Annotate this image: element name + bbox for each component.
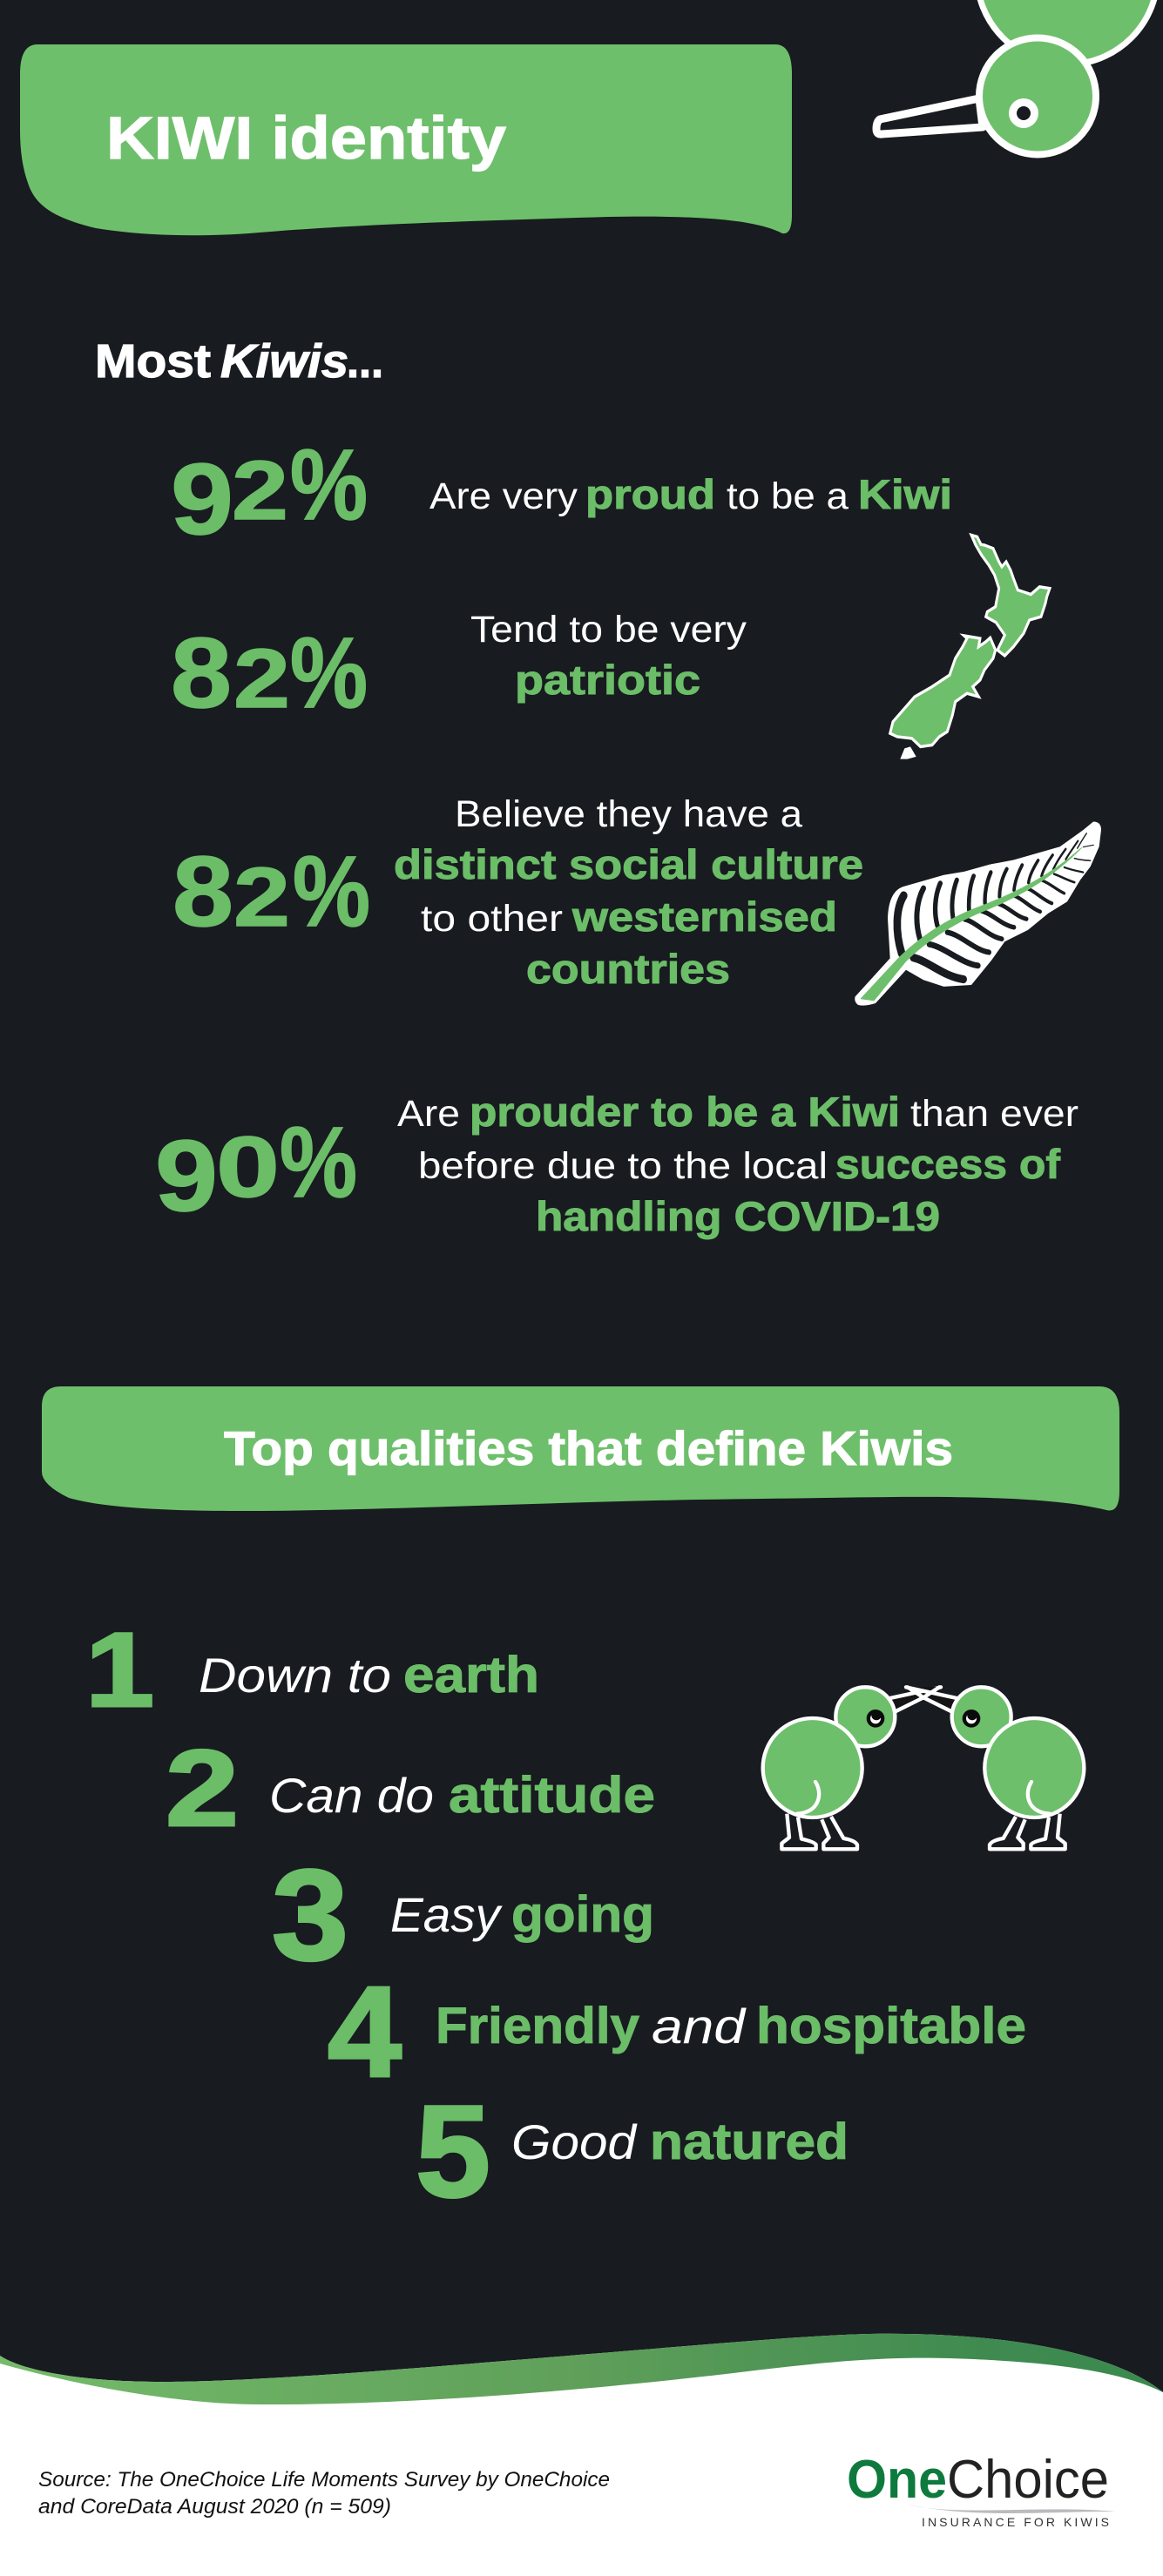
text: proud to be a Kiwi: Are very bbox=[429, 475, 578, 517]
right kiwi bbox=[906, 1687, 1084, 1849]
number: 90%: 9 bbox=[155, 1119, 218, 1232]
icon: silver fern bbox=[855, 822, 1101, 1006]
text: tend to be very patriotic: patriotic bbox=[515, 657, 700, 703]
stat: 90% prouder than ever bbox=[155, 1089, 1078, 1239]
quality 5: good natured: natured bbox=[650, 2114, 849, 2170]
left kiwi bbox=[763, 1687, 941, 1849]
text: distinct social culture: distinct social culture bbox=[394, 841, 863, 887]
logo: OneChoice: Choice bbox=[947, 2450, 1109, 2510]
quality 4: friendly and hospitable: 4 bbox=[328, 1960, 402, 2104]
quality 5: good natured bbox=[416, 2078, 849, 2224]
quality 4: friendly and hospitable: and bbox=[652, 1999, 747, 2053]
heading: Most Kiwis: Most bbox=[95, 335, 211, 388]
title banner: KIWI identity bbox=[106, 105, 506, 172]
text: distinct social culture: Believe they have a bbox=[455, 793, 802, 835]
text: distinct social culture: to other bbox=[421, 898, 563, 940]
title banner bbox=[20, 44, 792, 235]
quality 2: can do attitude: attitude bbox=[449, 1767, 655, 1824]
quality 4: friendly and hospitable: Friendly bbox=[436, 1998, 639, 2054]
number: 90% bbox=[155, 1107, 357, 1232]
text: proud to be a Kiwi: proud bbox=[585, 471, 715, 517]
source note: Source: The OneChoice Life Moments Survey by OneChoice bbox=[38, 2468, 610, 2492]
logo: OneChoice: One bbox=[847, 2450, 947, 2510]
quality 1: down to earth: earth bbox=[403, 1647, 539, 1703]
number: 90%: % bbox=[280, 1107, 357, 1218]
number: 82% bbox=[171, 617, 368, 729]
number: 90%: 0 bbox=[216, 1118, 280, 1215]
icon: map of New Zealand bbox=[890, 535, 1050, 759]
text: prouder due to COVID-19: success of bbox=[835, 1141, 1060, 1187]
section banner: top qualities: Top qualities that define Kiwis bbox=[224, 1421, 953, 1475]
number: 92%: 2 bbox=[232, 444, 288, 537]
logo: OneChoice bbox=[847, 2450, 1115, 2529]
stat: 82% distinct social culture bbox=[172, 793, 863, 992]
number: 82%: 2 bbox=[233, 632, 290, 725]
number: 82%: 8 bbox=[171, 618, 232, 729]
quality 3: easy going: going bbox=[511, 1886, 654, 1943]
quality 1: down to earth: 1 bbox=[85, 1610, 154, 1729]
number: 82% bbox=[172, 836, 370, 947]
footer wave bbox=[0, 2334, 1163, 2576]
quality 3: easy going: 3 bbox=[272, 1844, 348, 1987]
section banner: top qualities bbox=[42, 1386, 1119, 1511]
quality 3: easy going: Easy bbox=[390, 1887, 503, 1942]
number: 92%: % bbox=[290, 429, 368, 541]
heading: Most Kiwis: Kiwis bbox=[220, 335, 348, 388]
text: prouder due to COVID-19 bbox=[397, 1089, 1078, 1239]
quality 1: down to earth bbox=[85, 1610, 539, 1729]
text: tend to be very patriotic: Tend to be very bbox=[470, 609, 747, 651]
source note: and CoreData August 2020 (n = 509) bbox=[38, 2495, 391, 2519]
text: proud to be a Kiwi: to be a bbox=[727, 475, 849, 517]
number: 92% bbox=[171, 429, 368, 556]
quality 4: friendly and hospitable: hospitable bbox=[756, 1998, 1026, 2054]
heading: Most Kiwis bbox=[95, 335, 383, 388]
heading: Most Kiwis: ... bbox=[347, 335, 383, 388]
icon: two kiwi birds touching beaks bbox=[763, 1687, 1084, 1849]
text: distinct social culture: countries bbox=[526, 946, 730, 992]
logo: OneChoice: INSURANCE FOR KIWIS bbox=[922, 2515, 1109, 2529]
quality 4: friendly and hospitable bbox=[328, 1960, 1026, 2104]
stat: 92% proud bbox=[171, 429, 952, 556]
source note bbox=[38, 2468, 610, 2519]
quality 2: can do attitude bbox=[166, 1729, 655, 1849]
text: prouder due to COVID-19: handling COVID-19 bbox=[536, 1193, 940, 1239]
number: 82%: % bbox=[290, 617, 368, 729]
text: proud to be a Kiwi bbox=[429, 471, 952, 517]
quality 2: can do attitude: Can do bbox=[269, 1768, 434, 1823]
number: 82%: 8 bbox=[172, 837, 233, 947]
quality 3: easy going bbox=[272, 1844, 654, 1987]
text: prouder due to COVID-19: prouder to be a Kiwi bbox=[470, 1089, 900, 1135]
stat: 82% patriotic bbox=[171, 609, 747, 729]
number: 82%: % bbox=[293, 836, 370, 947]
quality 1: down to earth: Down to bbox=[199, 1648, 391, 1703]
quality 5: good natured: Good bbox=[511, 2114, 638, 2169]
text: proud to be a Kiwi: Kiwi bbox=[858, 471, 952, 517]
text: tend to be very patriotic bbox=[470, 609, 747, 703]
number: 82%: 2 bbox=[233, 851, 290, 944]
quality 5: good natured: 5 bbox=[416, 2078, 490, 2224]
number: 92%: 9 bbox=[171, 442, 233, 556]
text: prouder due to COVID-19: than ever bbox=[910, 1093, 1078, 1135]
icon: kiwi head at top right bbox=[876, 0, 1158, 155]
text: distinct social culture bbox=[394, 793, 863, 992]
quality 2: can do attitude: 2 bbox=[166, 1729, 239, 1849]
text: prouder due to COVID-19: Are bbox=[397, 1093, 460, 1135]
text: prouder due to COVID-19: before due to the local bbox=[418, 1145, 828, 1187]
text: distinct social culture: westernised bbox=[571, 894, 837, 940]
